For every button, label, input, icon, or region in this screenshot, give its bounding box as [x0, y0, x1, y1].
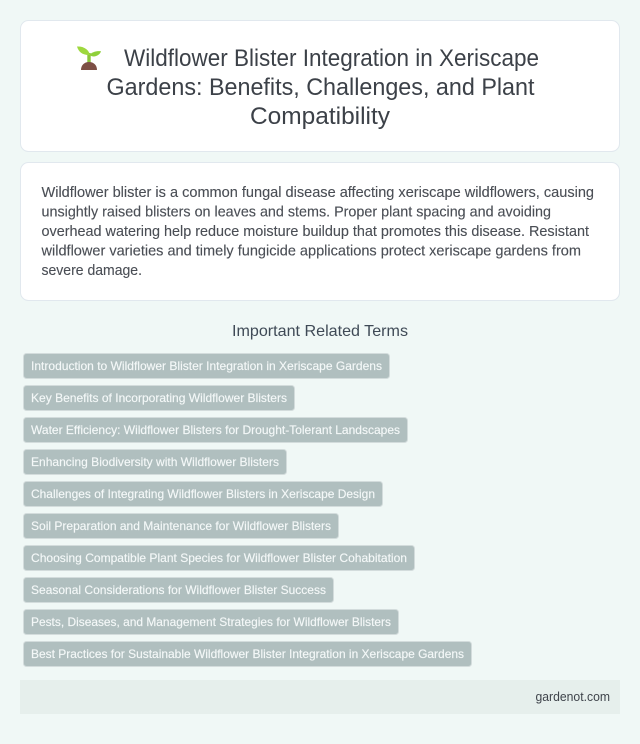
panel: title card [20, 20, 620, 152]
tag 9 [24, 610, 398, 634]
tag 4 [24, 450, 286, 474]
panel: description card [20, 162, 620, 300]
text block: description: unsightly raised blisters on leaves and stems. Proper plant spacing and avoiding [42, 204, 551, 220]
tag 7 [24, 546, 414, 570]
heading: title: Compatibility [250, 103, 390, 130]
text block: description: Wildflower blister is a common fungal disease affecting xeriscape wildflowers, causing [42, 185, 594, 201]
heading: title [106, 45, 539, 130]
footer: source: gardenot.com [536, 689, 610, 704]
tag 9: Pests, Diseases, and Management Strategies for Wildflower Blisters [31, 615, 391, 629]
text block: description: severe damage. [42, 263, 142, 279]
icon: sprout [77, 46, 101, 70]
heading: title: Gardens: Benefits, Challenges, and Plant [106, 74, 535, 101]
tag 5 [24, 482, 382, 506]
tag 4: Enhancing Biodiversity with Wildflower Blisters [31, 455, 279, 469]
list: related term tags [24, 354, 472, 666]
tag 8 [24, 578, 334, 602]
footer bar [20, 680, 620, 714]
tag 3: Water Efficiency: Wildflower Blisters for Drought-Tolerant Landscapes [31, 423, 400, 437]
text block: description: wildflower varieties and timely fungicide applications protect xeriscape gardens from [40, 244, 581, 260]
tag 7: Choosing Compatible Plant Species for Wildflower Blister Cohabitation [31, 551, 407, 565]
tag 6 [24, 514, 338, 538]
tag 1: Introduction to Wildflower Blister Integration in Xeriscape Gardens [31, 359, 382, 373]
heading: title: Wildflower Blister Integration in Xeriscape [124, 45, 539, 72]
tag 10 [24, 642, 472, 666]
tag 2: Key Benefits of Incorporating Wildflower Blisters [31, 391, 287, 405]
text block: description [40, 185, 594, 279]
tag 6: Soil Preparation and Maintenance for Wildflower Blisters [31, 519, 331, 533]
tag 5: Challenges of Integrating Wildflower Blisters in Xeriscape Design [31, 487, 375, 501]
tag 8: Seasonal Considerations for Wildflower Blister Success [31, 583, 326, 597]
tag 2 [24, 386, 294, 410]
tag 1 [24, 354, 390, 378]
tag 10: Best Practices for Sustainable Wildflower Blister Integration in Xeriscape Gardens [31, 647, 464, 661]
heading: important related terms: Important Related Terms [232, 323, 408, 340]
tag 3 [24, 418, 408, 442]
text block: description: overhead watering help reduce moisture buildup that promotes this disease. Resistant [42, 224, 589, 240]
